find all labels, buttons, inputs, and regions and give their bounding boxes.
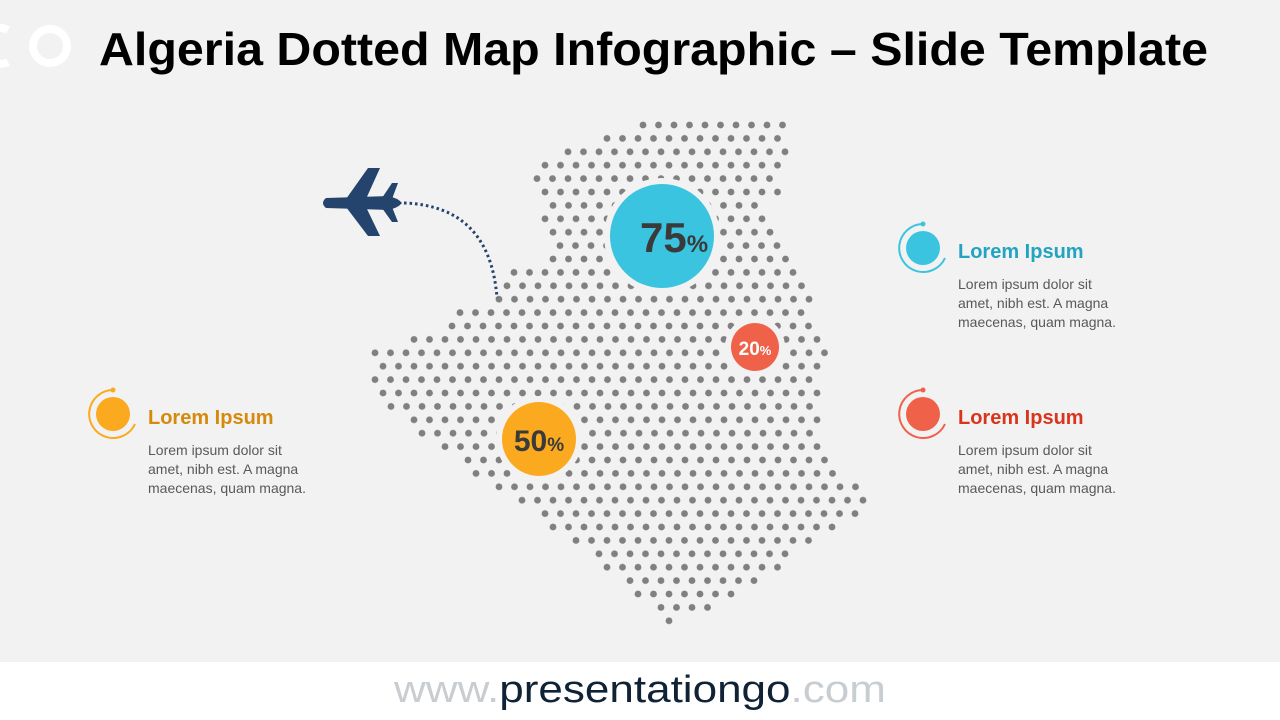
item: orange: maecenas, quam magna. bbox=[148, 480, 306, 496]
arrow: dotted flight path bbox=[404, 203, 497, 298]
footer bbox=[0, 662, 1280, 720]
badge: 75%: 75% bbox=[640, 214, 708, 261]
badge: 50% bbox=[496, 396, 582, 482]
item: orange bbox=[89, 388, 306, 496]
icon: blue circle bbox=[899, 222, 945, 272]
badge: 75% bbox=[604, 178, 720, 294]
icon: airplane bbox=[323, 168, 402, 236]
item: orange: amet, nibh est. A magna bbox=[148, 461, 298, 477]
item: blue bbox=[899, 222, 1116, 330]
item: blue: amet, nibh est. A magna bbox=[958, 295, 1108, 311]
item: red bbox=[899, 388, 1116, 496]
item: orange: Lorem Ipsum bbox=[148, 407, 274, 429]
item: red: Lorem Ipsum bbox=[958, 407, 1084, 429]
footer: www. presentationgo .com bbox=[393, 669, 886, 711]
item: blue: maecenas, quam magna. bbox=[958, 314, 1116, 330]
item: red: Lorem ipsum dolor sit bbox=[958, 442, 1092, 458]
item: blue: Lorem ipsum dolor sit bbox=[958, 276, 1092, 292]
badge: 20% bbox=[725, 317, 785, 377]
icon: red circle bbox=[899, 388, 945, 438]
title: Algeria Dotted Map Infographic – Slide Template bbox=[99, 23, 1208, 75]
icon: orange circle bbox=[89, 388, 135, 438]
item: red: amet, nibh est. A magna bbox=[958, 461, 1108, 477]
badge: 50%: 50% bbox=[514, 425, 564, 458]
item: orange: Lorem ipsum dolor sit bbox=[148, 442, 282, 458]
dotted map bbox=[371, 121, 874, 625]
item: blue: Lorem Ipsum bbox=[958, 241, 1084, 263]
badge: 20%: 20% bbox=[739, 339, 772, 360]
item: red: maecenas, quam magna. bbox=[958, 480, 1116, 496]
logo: GO bbox=[0, 28, 67, 64]
